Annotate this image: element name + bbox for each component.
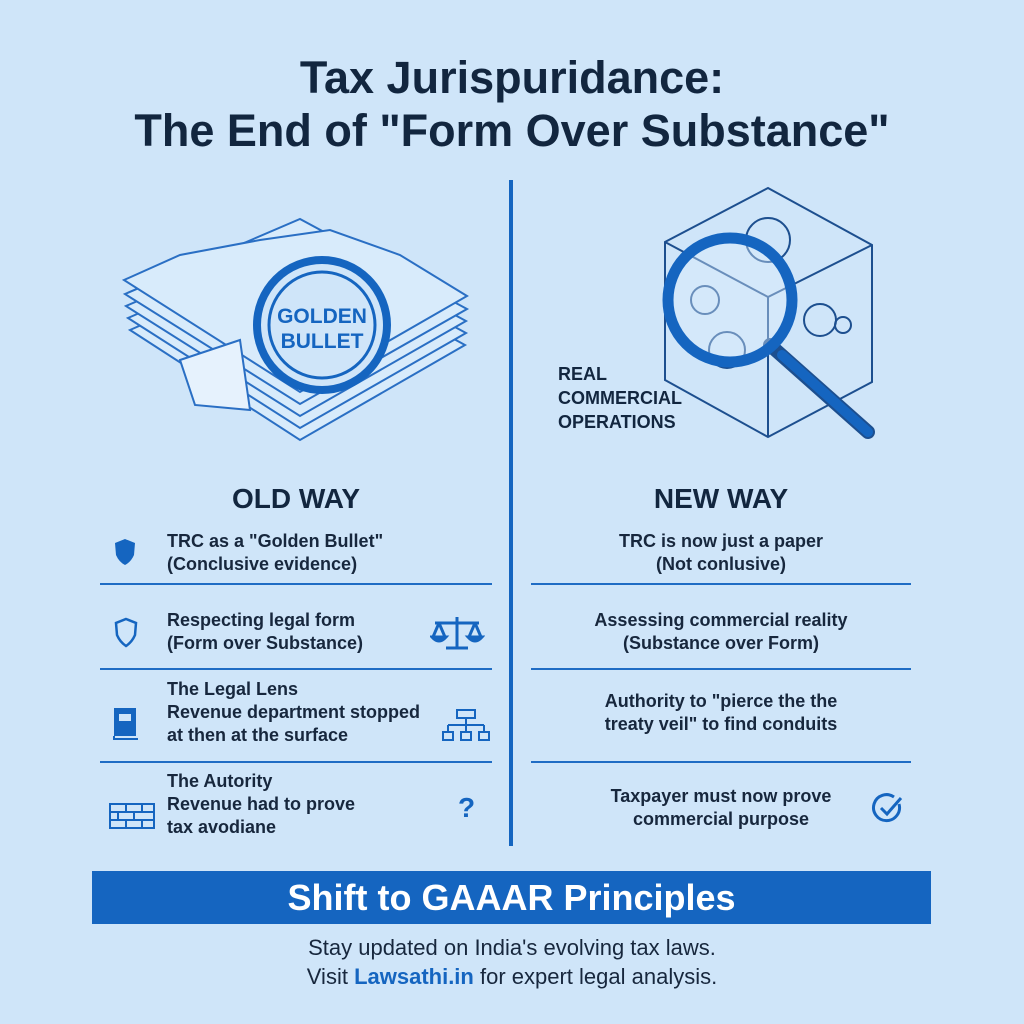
- title: Tax Jurispuridance:: [300, 52, 724, 103]
- center divider: [509, 180, 513, 846]
- old item 1: TRC as a "Golden Bullet": [167, 531, 383, 551]
- banner: Shift to GAAAR Principles: [287, 877, 736, 918]
- old item 4: [167, 771, 355, 837]
- old item 3: The Legal Lens: [167, 679, 298, 699]
- new item 2: Assessing commercial reality: [594, 610, 848, 630]
- old item 3: [167, 679, 420, 745]
- old item 2: (Form over Substance): [167, 633, 363, 653]
- old item 3: at then at the surface: [167, 725, 348, 745]
- label: real commercial operations: COMMERCIAL: [558, 388, 682, 408]
- footer: Visit Lawsathi.in for expert legal analysis.: [307, 964, 717, 989]
- new item 2: [594, 610, 848, 653]
- new item 3: Authority to "pierce the the: [605, 691, 837, 711]
- old item 2: [167, 610, 363, 653]
- old item 4: The Autority: [167, 771, 272, 791]
- icon: shield outline: [114, 618, 138, 648]
- label: real commercial operations: OPERATIONS: [558, 412, 676, 432]
- title: The End of "Form Over Substance": [134, 105, 890, 156]
- icon: org chart: [442, 709, 490, 741]
- old item 2: Respecting legal form: [167, 610, 355, 630]
- new item 2: (Substance over Form): [623, 633, 819, 653]
- label: real commercial operations: REAL: [558, 364, 607, 384]
- illustration: paper stack with golden bullet stamp: BULLET: [281, 330, 364, 353]
- illustration: paper stack with golden bullet stamp: GOLDEN: [277, 305, 367, 328]
- new item 4: commercial purpose: [633, 809, 809, 829]
- new item 4: [610, 786, 831, 829]
- footer: Stay updated on India's evolving tax laws.: [308, 935, 716, 960]
- icon: book: [113, 708, 138, 740]
- new item 1: (Not conlusive): [656, 554, 786, 574]
- heading: old way: OLD WAY: [232, 483, 360, 514]
- old item 4: tax avodiane: [167, 817, 276, 837]
- icon: question mark: ?: [458, 792, 475, 823]
- old item 3: Revenue department stopped: [167, 702, 420, 722]
- footer: [306, 935, 717, 989]
- illustration: paper stack with golden bullet stamp: [122, 218, 469, 442]
- new item 3: treaty veil" to find conduits: [605, 714, 837, 734]
- old item 1: (Conclusive evidence): [167, 554, 357, 574]
- new item 3: [604, 691, 837, 734]
- new item 1: TRC is now just a paper: [619, 531, 823, 551]
- new way list: [531, 531, 911, 829]
- icon: shield filled: [115, 539, 135, 565]
- illustration: cube with gears and magnifier: [662, 186, 875, 439]
- icon: check circle: [872, 793, 902, 822]
- old way list: [100, 531, 492, 837]
- label: real commercial operations: [558, 364, 682, 432]
- old item 1: [167, 531, 383, 574]
- title: [134, 52, 890, 156]
- icon: bricks: [109, 803, 155, 829]
- banner: [92, 871, 931, 924]
- heading: new way: NEW WAY: [654, 483, 788, 514]
- new item 4: Taxpayer must now prove: [611, 786, 831, 806]
- new item 1: [619, 531, 823, 574]
- old item 4: Revenue had to prove: [167, 794, 355, 814]
- icon: scales: [430, 617, 485, 650]
